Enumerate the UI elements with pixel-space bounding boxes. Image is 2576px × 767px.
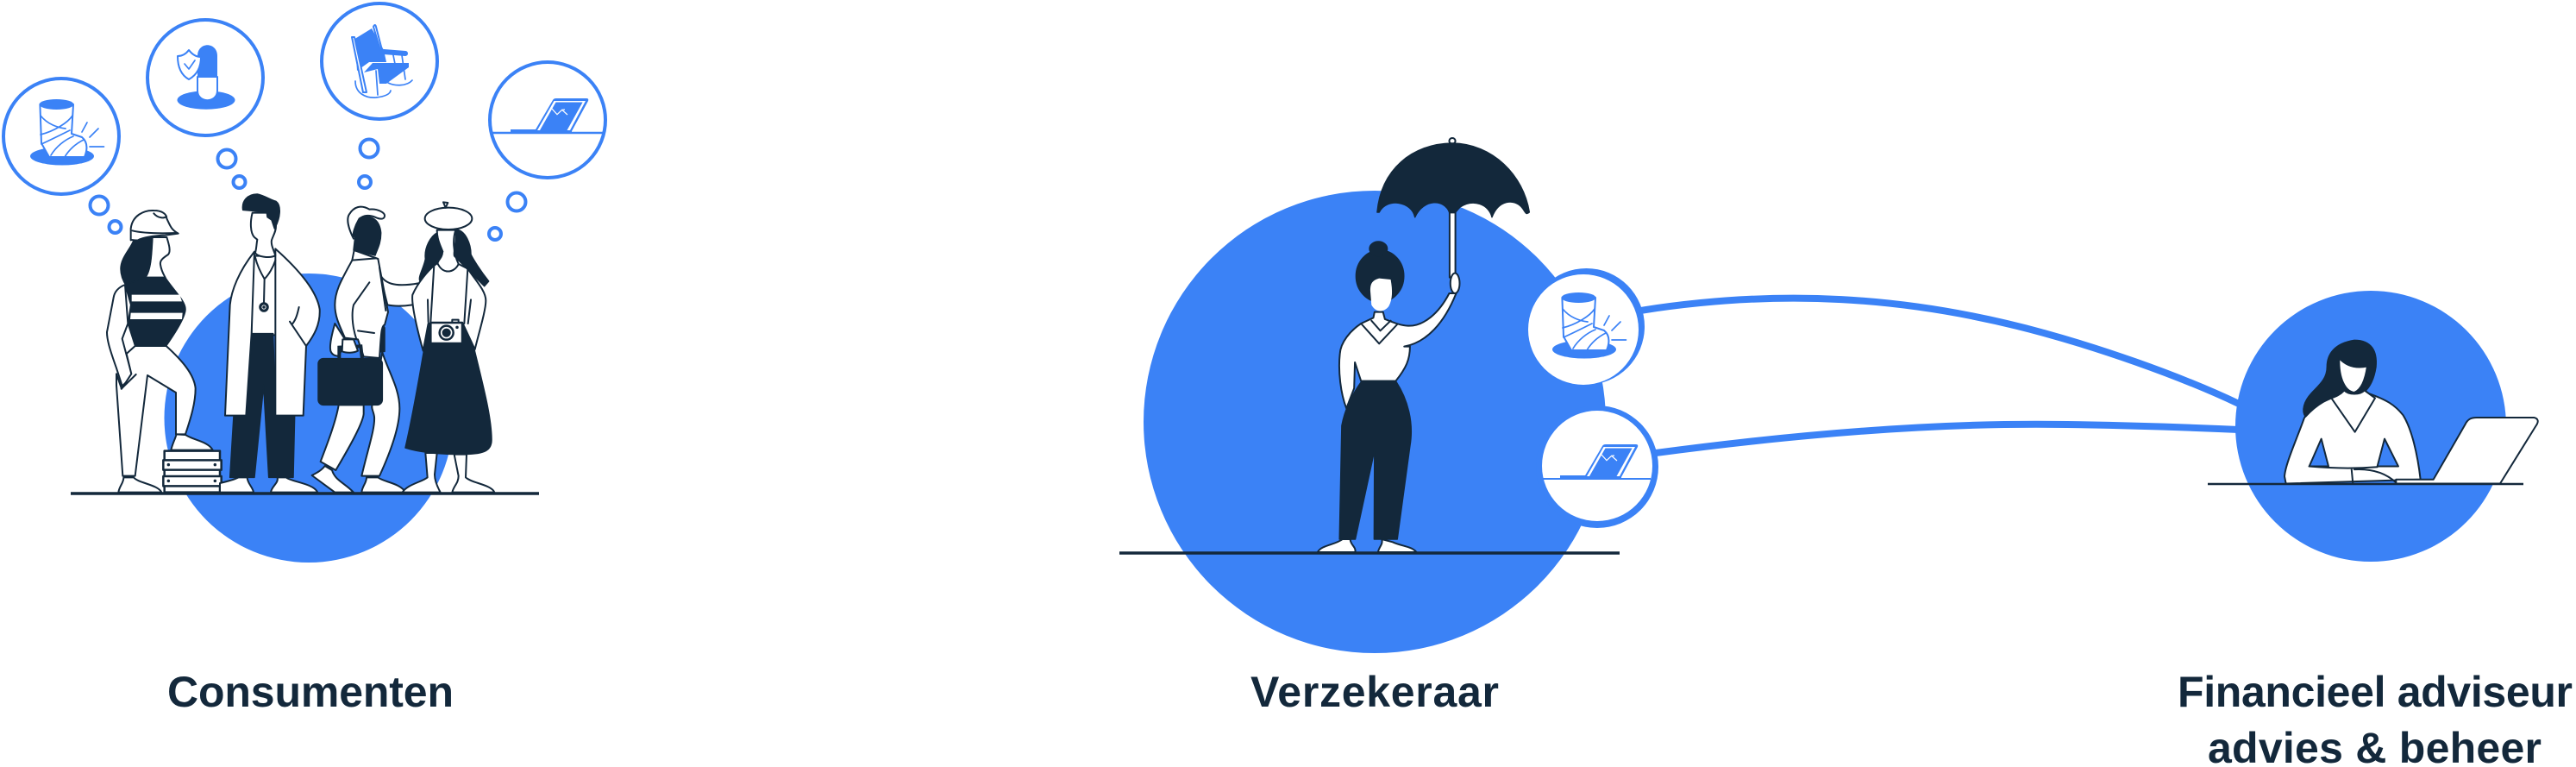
figure: woman with cap and striped top [107,211,222,493]
figure: woman with beret and camera [403,202,494,493]
blue circle behind consumers [164,273,454,563]
ground line: insurer [1119,551,1620,555]
figure: woman holding umbrella [1318,138,1529,552]
connector: laptop to adviser [1656,424,2239,453]
connector: broken leg to adviser [1640,299,2239,404]
large blue circle [1144,191,1606,653]
figure: doctor in white coat [220,194,320,493]
thought bubble: broken leg [3,79,121,233]
panel: verzekeraar [1119,138,1658,716]
heading: Consumenten: Consumenten [167,668,454,716]
insured item: laptop [1536,406,1658,528]
figure: adviser at laptop [2285,340,2538,484]
umbrella [1377,138,1529,278]
thought bubble: rocking chair [322,3,437,188]
blue circle behind adviser [2235,291,2506,562]
heading: Financieel adviseur, advies & beheer [2178,668,2573,767]
ground line: consumers [71,492,539,495]
panel: consumenten [3,3,605,716]
panel: financieel adviseur [2178,291,2573,767]
heading: Verzekeraar: Verzekeraar [1250,668,1499,716]
thought bubble: pill and shield [147,20,263,188]
figure: man with briefcase [312,207,418,493]
ground line: adviser [2208,483,2523,485]
insured item: broken leg [1528,268,1645,385]
thought bubble: laptop with chart [489,62,605,240]
heading: Financieel adviseur, advies & beheer: Financieel adviseur [2178,668,2573,716]
